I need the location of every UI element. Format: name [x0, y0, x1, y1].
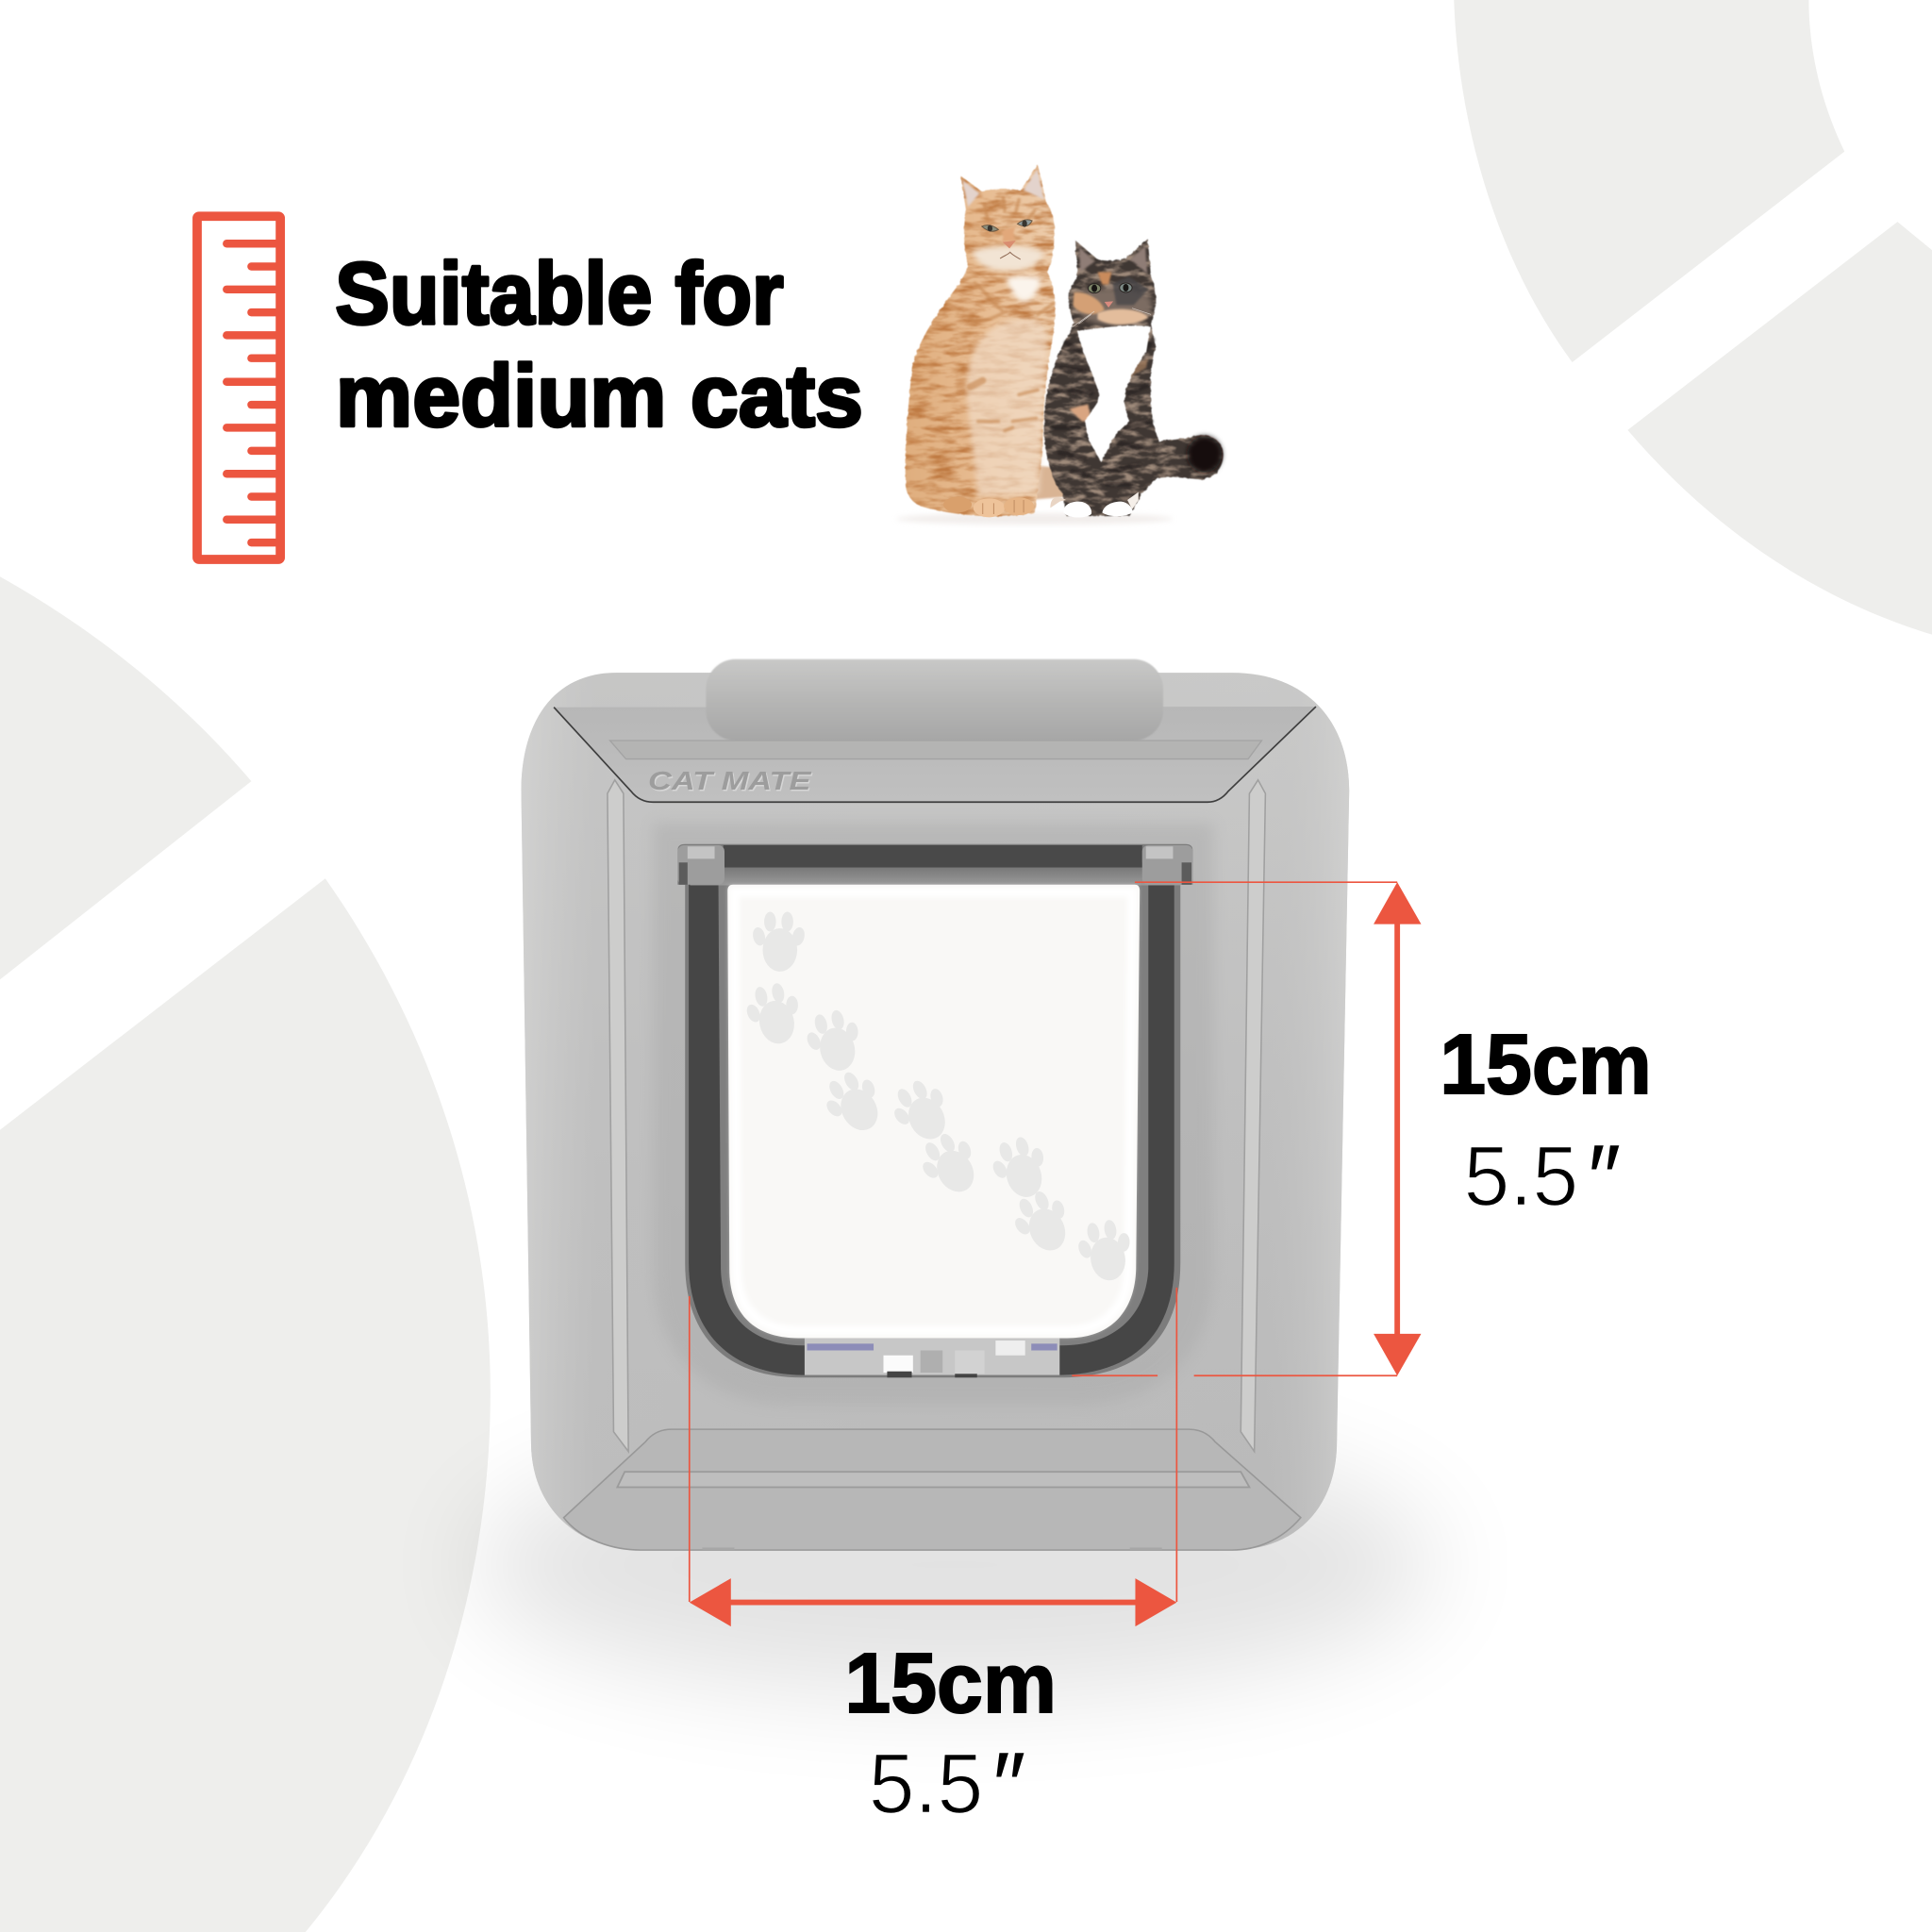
frosted flap	[727, 885, 1140, 1338]
brand name: CAT MATE	[648, 766, 812, 795]
orange tabby cat	[906, 165, 1066, 517]
width dimension: extension lines and double arrow	[690, 1288, 1176, 1626]
height label: 5.5 inches: 5.5	[1464, 1128, 1578, 1224]
back haunch	[1028, 465, 1066, 500]
top panel with engraved outline	[554, 707, 1316, 802]
left hinge	[677, 845, 724, 885]
paw prints on flap	[741, 912, 1138, 1285]
flap frosted highlight	[734, 892, 1132, 1331]
tortoiseshell cat	[1044, 239, 1224, 518]
top ridge	[610, 741, 1261, 759]
inner grey band	[718, 874, 1148, 1345]
bottom ridge	[617, 1472, 1249, 1487]
photo: two cats	[896, 165, 1224, 525]
door side highlights	[521, 673, 1349, 1550]
height label: 5.5 inches: ″	[1583, 1126, 1619, 1231]
heading: suitable for medium cats: medium cats	[336, 346, 863, 444]
icon: ruler	[197, 216, 280, 559]
tunnel frame	[677, 844, 1192, 1377]
product: cat flap door	[521, 659, 1349, 1550]
width label: 5.5 inches: ″	[989, 1734, 1024, 1839]
width label: 5.5 inches	[869, 1734, 1024, 1839]
tortoiseshell cat eyes	[1088, 283, 1132, 293]
brand name: CAT MATE	[649, 768, 813, 797]
floor shadow under cats	[896, 513, 1173, 525]
width label: 5.5 inches: 5.5	[869, 1736, 983, 1831]
top brush strip	[724, 845, 1142, 868]
background shape: right arc	[1627, 222, 1932, 635]
drop shadow under cat flap	[475, 1436, 1436, 1694]
bottom panel	[564, 1429, 1301, 1550]
height label: 5.5 inches	[1464, 1126, 1619, 1231]
width label: 15cm: 15cm	[844, 1636, 1057, 1731]
dark tunnel track	[689, 862, 1174, 1375]
left side ridge	[608, 780, 628, 1452]
translucent flap bar	[690, 868, 1180, 885]
white chest	[1077, 325, 1150, 462]
right hinge	[1142, 845, 1192, 885]
right side ridge	[1241, 780, 1265, 1452]
background shape: upper right arc	[1454, 0, 1844, 362]
top handle	[706, 659, 1163, 741]
foot notches	[702, 1547, 1162, 1550]
orange cat eyes	[982, 220, 1032, 231]
background shape: left wedge	[0, 576, 251, 979]
height label: 15cm: 15cm	[1440, 1017, 1652, 1112]
heading: suitable for medium cats: Suitable for	[335, 244, 784, 342]
heading: suitable for medium cats	[335, 244, 863, 444]
height dimension: extension lines and double arrow	[1072, 882, 1421, 1375]
dark tabby bands	[1052, 340, 1154, 484]
bottom latch mechanism	[805, 1338, 1059, 1377]
recess shadow around the tunnel	[653, 823, 1214, 1405]
door body	[521, 673, 1349, 1550]
background shape: lower left arc	[0, 878, 491, 1932]
